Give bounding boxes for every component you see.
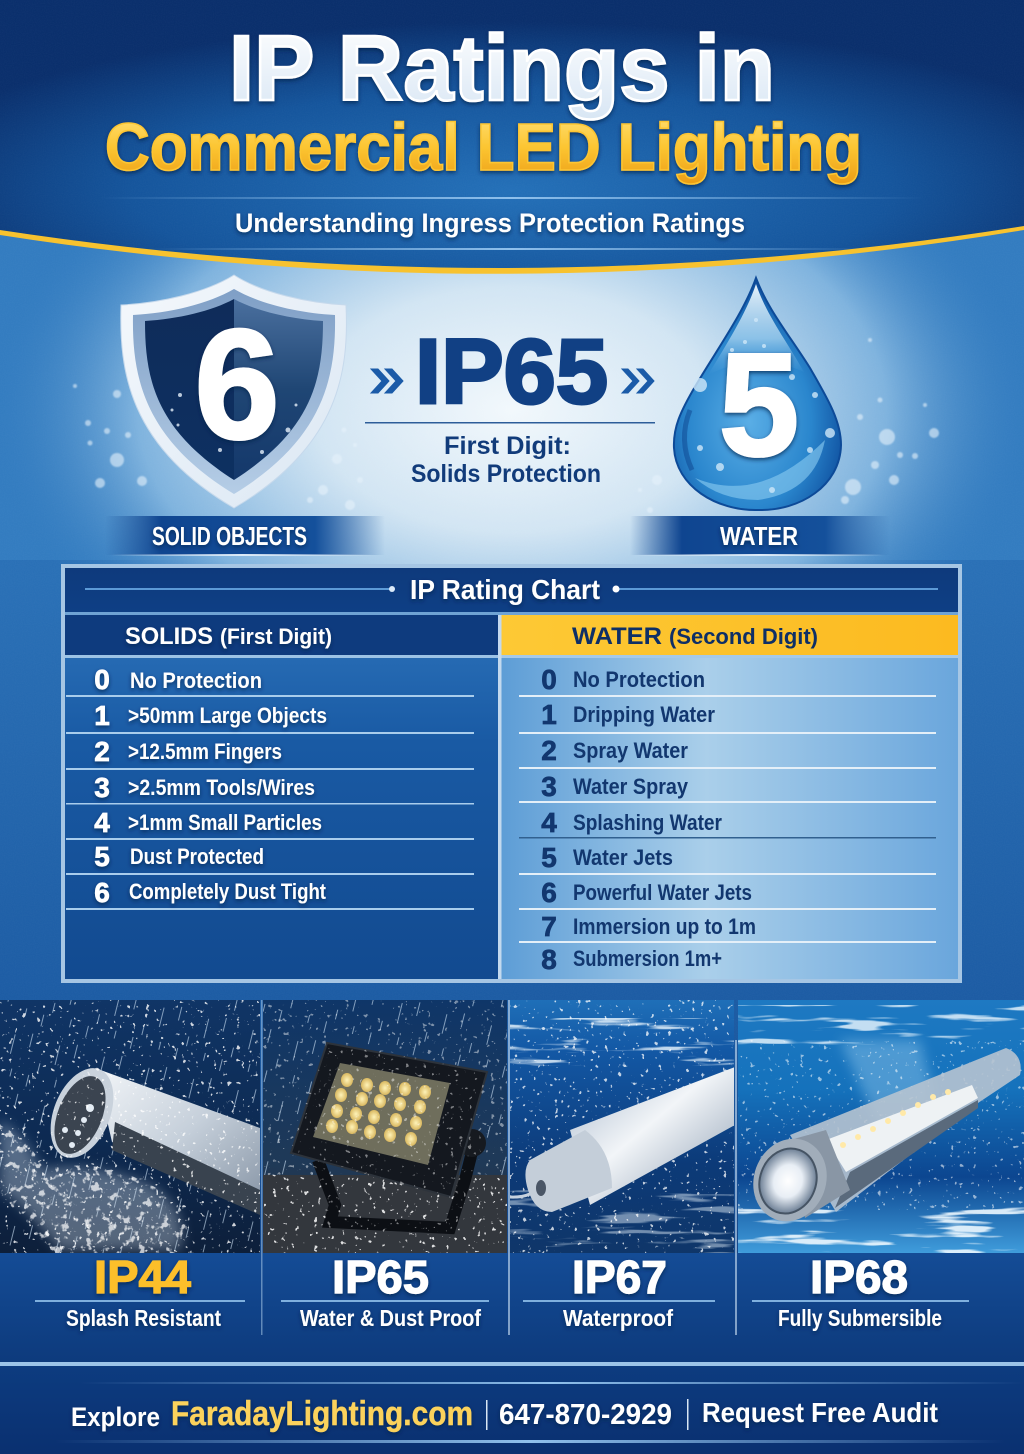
water rows: 1 — [541, 699, 557, 730]
label band: solid objects — [105, 516, 385, 556]
lens disc — [50, 1068, 114, 1158]
digit 5: 5 — [719, 323, 799, 486]
solids rows: >50mm Large Objects — [128, 703, 327, 728]
water label: WATER — [720, 521, 798, 551]
photo panel: IP67 tube — [510, 1000, 735, 1253]
strip LEDs — [840, 1089, 951, 1148]
caption IP68: IP68 — [810, 1251, 908, 1303]
caption IP67 — [523, 1251, 715, 1331]
water rows: Water Jets — [573, 845, 673, 870]
phone: 647-870-2929 — [499, 1399, 672, 1431]
solids header: SOLIDS — [125, 623, 213, 650]
water column — [501, 615, 958, 979]
water rows: 8 — [541, 944, 557, 975]
solids header note: (First Digit) — [220, 624, 332, 649]
droplets around shield — [73, 384, 363, 510]
first digit caption: First Digit: — [444, 432, 571, 460]
IP65 code: IP65 — [415, 321, 608, 423]
solids rows: 6 — [94, 877, 110, 908]
water rows: 2 — [541, 735, 557, 766]
photo panel: IP44 splash fixture — [0, 1000, 260, 1253]
IP68 description: Fully Submersible — [778, 1305, 942, 1331]
icon: shield with 6 — [121, 275, 346, 508]
water rows: Submersion 1m+ — [573, 946, 722, 971]
tube — [95, 1068, 260, 1190]
end cap — [525, 1130, 612, 1212]
water rows: No Protection — [573, 667, 705, 692]
request audit: Request Free Audit — [702, 1397, 938, 1428]
cable — [510, 1192, 530, 1199]
water rows: 5 — [541, 842, 557, 873]
water rows — [541, 664, 756, 975]
solids protection caption: Solids Protection — [411, 460, 601, 488]
panel: photo captions — [0, 1000, 1024, 1364]
solids rows: 0 — [94, 664, 110, 695]
housing — [291, 1043, 487, 1197]
head — [790, 1130, 850, 1218]
title line 2: Commercial LED Lighting — [105, 110, 862, 185]
title — [105, 16, 862, 185]
caption IP44 — [35, 1251, 245, 1331]
solids rows — [94, 664, 327, 908]
chart title: IP Rating Chart — [410, 574, 600, 605]
caption IP67: IP67 — [572, 1251, 667, 1303]
photo panel: IP68 submersible tube — [738, 1000, 1024, 1253]
chart title bar — [65, 568, 958, 612]
solids rows: Completely Dust Tight — [129, 879, 327, 904]
photo panel: IP65 flood light — [263, 1000, 507, 1253]
solids rows: >12.5mm Fingers — [128, 739, 282, 764]
tube body — [790, 1048, 1021, 1212]
tube body — [570, 1067, 735, 1205]
solids rows: 4 — [94, 807, 110, 838]
footer — [0, 1362, 1024, 1454]
IP67 description: Waterproof — [563, 1305, 673, 1331]
solids rows: >1mm Small Particles — [128, 810, 322, 835]
solids column — [65, 615, 498, 979]
water rows: 0 — [541, 664, 557, 695]
solid objects label: SOLID OBJECTS — [152, 521, 307, 551]
solids rows: 2 — [94, 736, 110, 767]
water rows: 7 — [541, 911, 557, 942]
caption IP65: IP65 — [332, 1251, 429, 1303]
splash — [0, 1120, 182, 1250]
website: FaradayLighting.com — [171, 1395, 473, 1433]
subtitle: Understanding Ingress Protection Ratings — [235, 208, 745, 238]
water rows: Splashing Water — [573, 810, 722, 835]
LED array — [313, 1063, 450, 1165]
digit 6: 6 — [194, 298, 280, 472]
water header note: (Second Digit) — [669, 624, 818, 649]
solids rows: No Protection — [130, 668, 262, 693]
water rows: 4 — [541, 807, 557, 838]
caption IP68 — [752, 1251, 969, 1331]
caption IP44: IP44 — [94, 1251, 191, 1303]
water rows: 3 — [541, 771, 557, 802]
water header: WATER — [572, 623, 662, 650]
icon: water drop with 5 — [674, 278, 841, 510]
IP65 description: Water & Dust Proof — [300, 1305, 481, 1331]
label band: water — [630, 516, 890, 556]
solids rows: >2.5mm Tools/Wires — [128, 775, 315, 800]
water rows: Immersion up to 1m — [573, 914, 756, 939]
chevrons right — [622, 369, 654, 393]
explore text: Explore — [71, 1402, 160, 1432]
solids rows: 3 — [94, 772, 110, 803]
stand — [318, 1140, 475, 1228]
solids rows: 5 — [94, 841, 110, 872]
droplets around drop — [638, 338, 939, 513]
panel: IP rating chart — [61, 564, 962, 983]
water rows: Dripping Water — [573, 702, 715, 727]
IP44 description: Splash Resistant — [66, 1305, 221, 1331]
gold curved divider — [0, 226, 1024, 274]
title line 1: IP Ratings in — [229, 16, 775, 120]
water rows: Powerful Water Jets — [573, 880, 752, 905]
solids rows: Dust Protected — [130, 844, 264, 869]
caption IP65 — [281, 1251, 489, 1331]
chevrons left — [371, 369, 403, 393]
water rows: 6 — [541, 877, 557, 908]
water rows: Water Spray — [573, 774, 689, 799]
water rows: Spray Water — [573, 738, 688, 763]
central rating — [365, 321, 655, 488]
solids rows: 1 — [94, 700, 110, 731]
